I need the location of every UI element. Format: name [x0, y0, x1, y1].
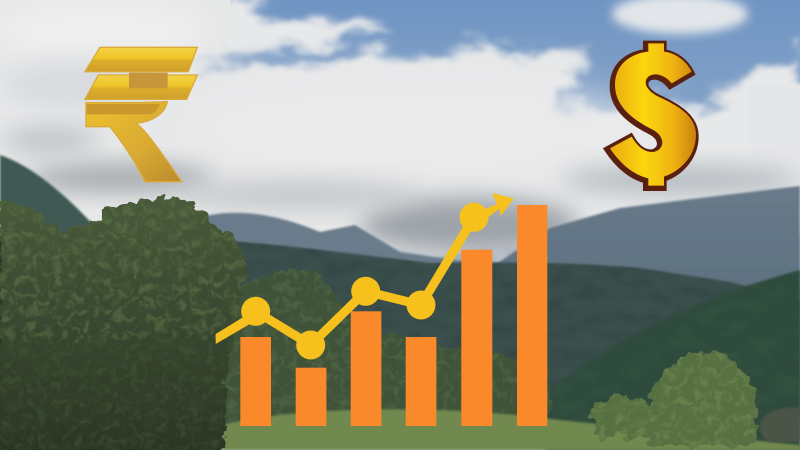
rock at right edge: [760, 408, 800, 442]
mid forest ridge: [215, 240, 800, 420]
icon: gold dollar symbol: [609, 43, 696, 187]
rupee connector: [129, 73, 168, 88]
bar chart: [240, 205, 547, 426]
left trees: [0, 190, 250, 450]
grass meadow: [222, 409, 800, 450]
dollar gold face: [610, 43, 696, 186]
right forest slope: [545, 270, 800, 450]
dollar dark offset shadow: [609, 45, 695, 187]
right bushes: [590, 345, 765, 450]
rupee bowl shadow: [87, 104, 160, 114]
mid bushes: [215, 260, 555, 430]
left mountain: [0, 155, 115, 270]
rupee middle bar: [85, 75, 197, 99]
tree backing at canvas edges: [0, 240, 220, 450]
far mountains: [205, 213, 470, 290]
clouds: [0, 0, 800, 260]
rupee top bar: [85, 47, 197, 72]
trend line with arrow: [216, 193, 513, 360]
icon: gold rupee symbol: [85, 47, 197, 182]
rupee lower bowl and leg: [86, 102, 182, 182]
